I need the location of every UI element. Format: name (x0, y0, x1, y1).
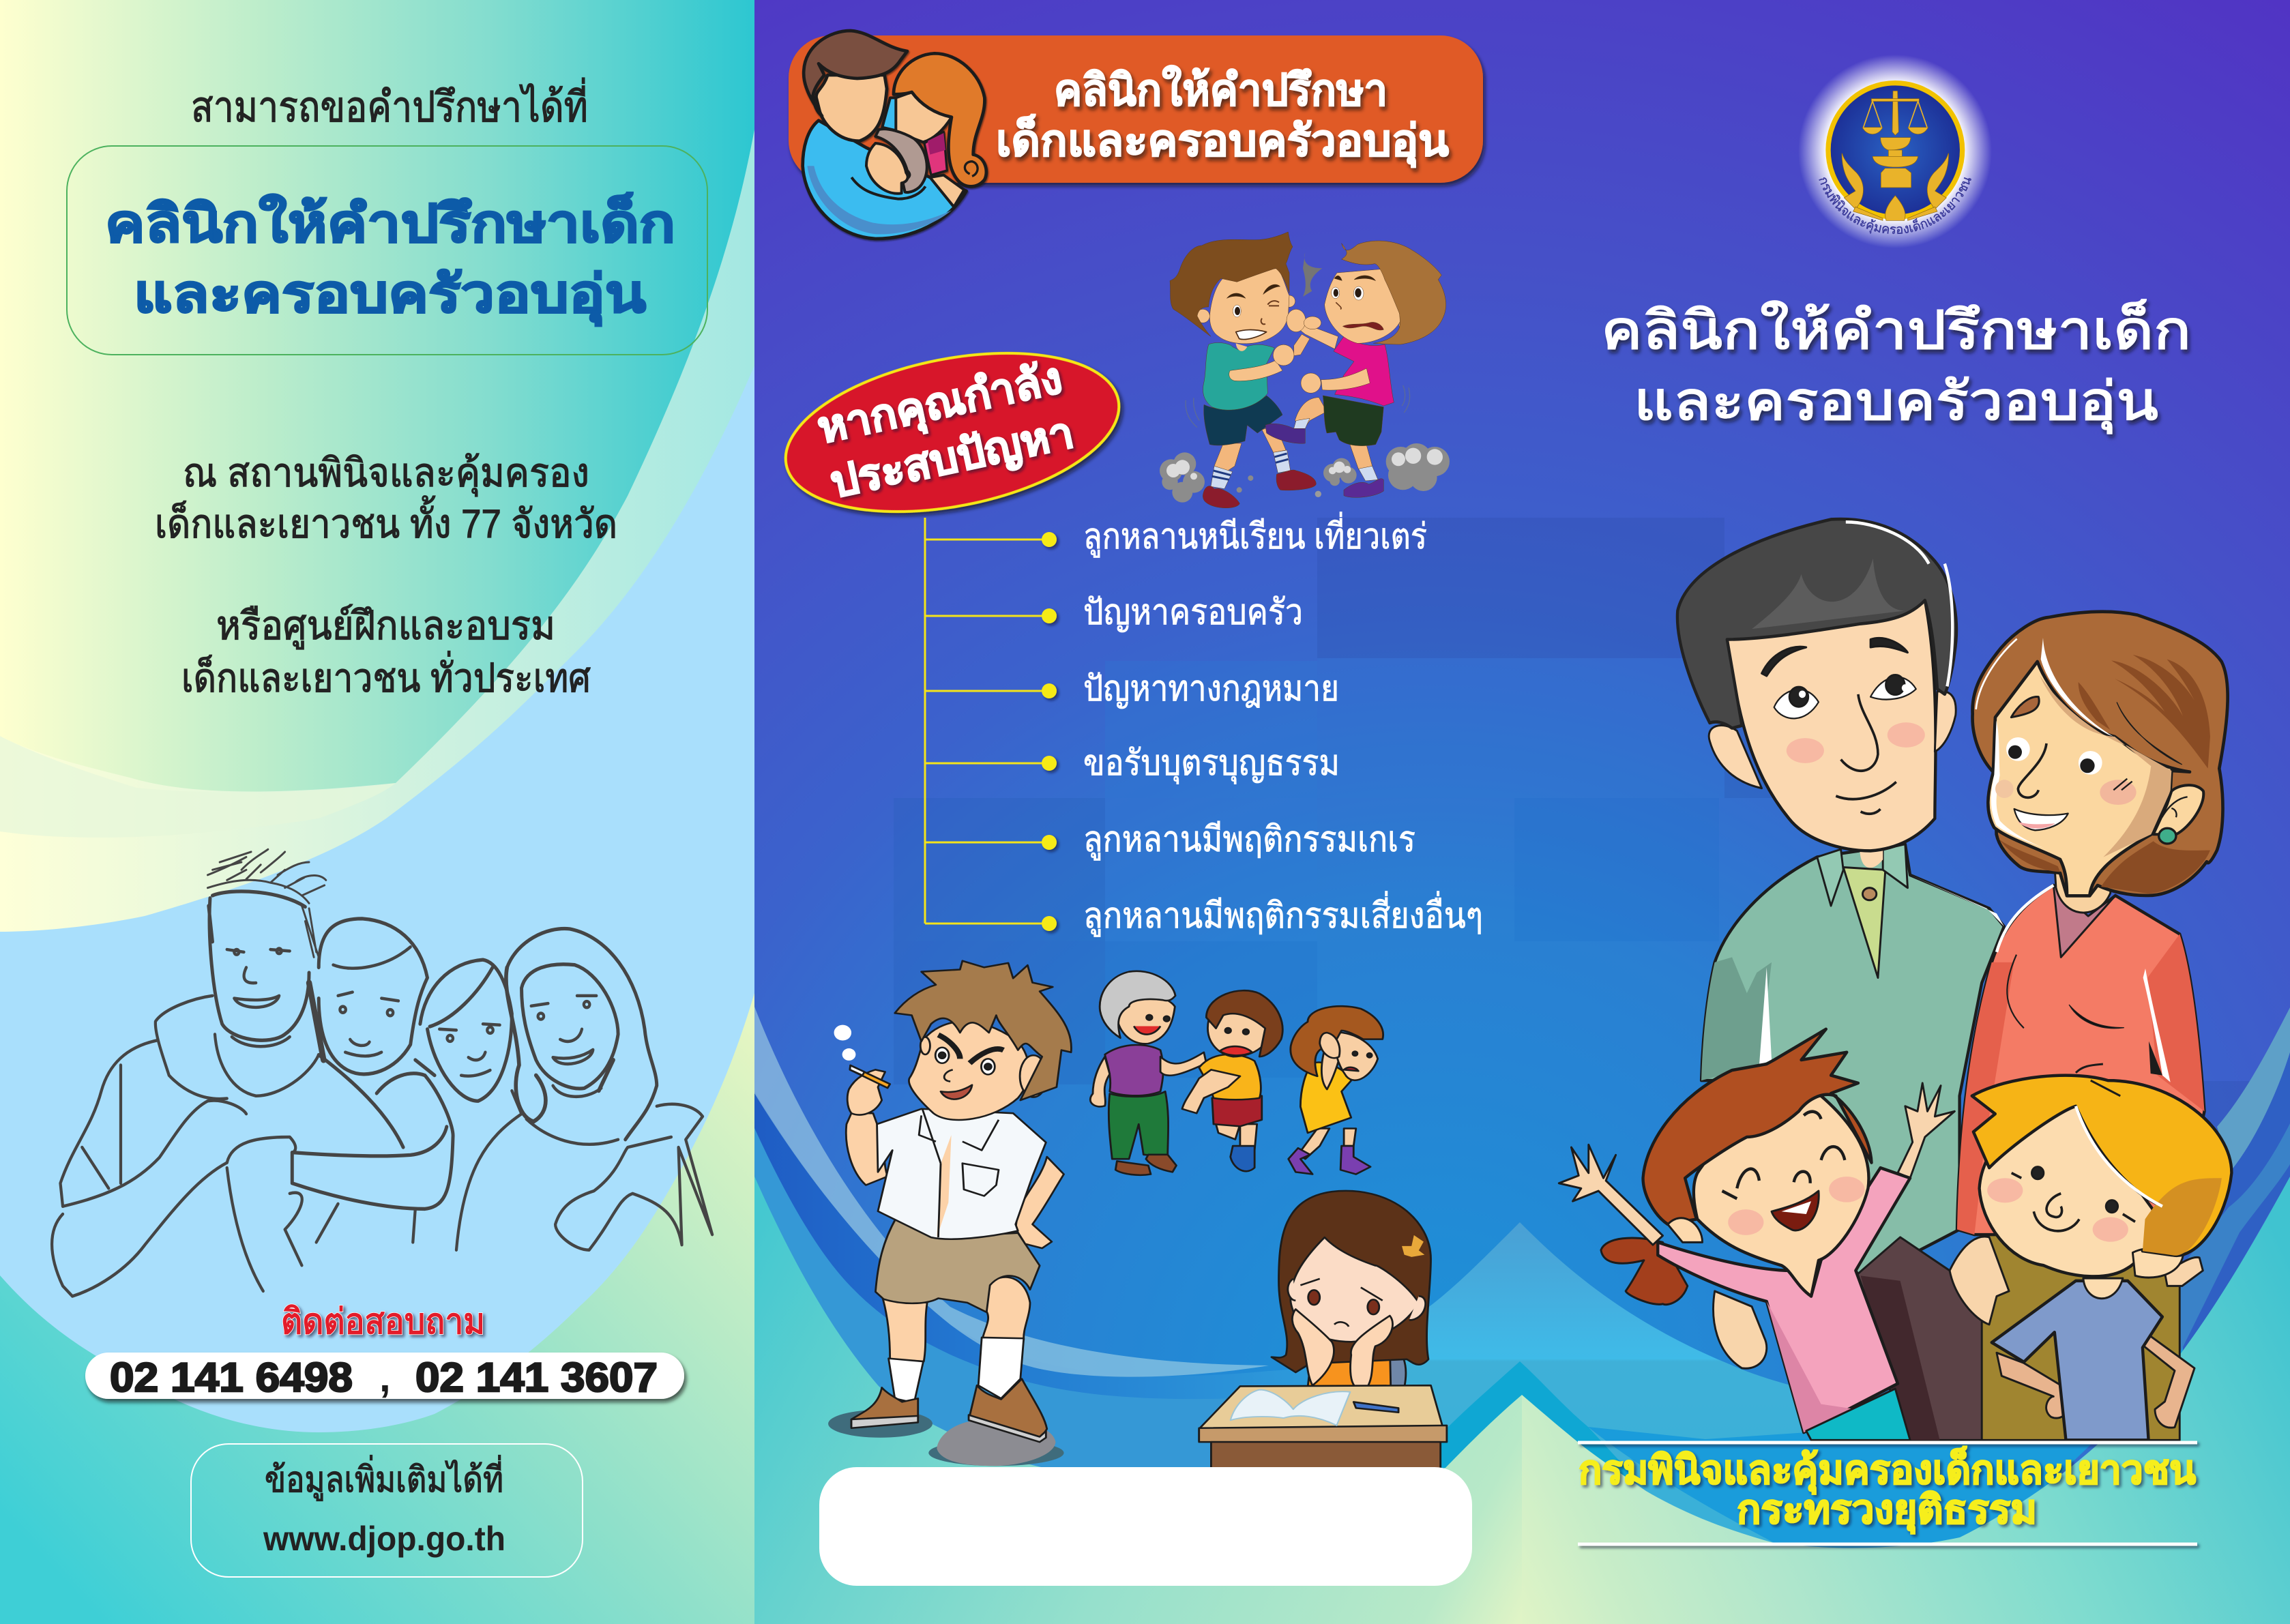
text block: locations: หรือศูนย์ฝึกและอบรม (216, 604, 555, 649)
mother head (1973, 612, 2228, 896)
swoosh bands center (754, 1091, 1364, 1501)
text block: locations: ณ สถานพินิจและคุ้มครอง (183, 451, 589, 497)
department name banner: กระทรวงยุติธรรม (1737, 1488, 2037, 1535)
phone number pill (85, 1353, 684, 1400)
illustration: happy family, father and mother (1677, 519, 2228, 1440)
text block: locations: เด็กและเยาวชน ทั้ง 77 จังหวัด (155, 496, 617, 546)
illustration: line drawing of family hugging (52, 849, 712, 1296)
swoosh bands right (2217, 1007, 2290, 1171)
header title text (996, 65, 1449, 168)
more information box: www.djop.go.th (263, 1520, 505, 1558)
icon: parents embracing baby (803, 31, 986, 239)
header title text: คลินิกให้คำปรึกษา (1054, 65, 1388, 115)
panel: bottom wave right (1522, 1177, 2290, 1624)
seal caption arc: กรมพินิจและคุ้มครองเด็กและเยาวชน (1819, 177, 1971, 235)
list of problems (1083, 512, 1483, 937)
panel: clinic name box (67, 146, 707, 355)
label: contact us: ติดต่อสอบถาม (281, 1302, 485, 1342)
roof peak light band (1262, 1222, 1520, 1480)
text block: locations (155, 451, 617, 700)
panel: main blue background (754, 0, 2290, 1624)
phone number pill: 02 141 6498 (110, 1355, 353, 1400)
more information box (191, 1444, 583, 1577)
header title text: เด็กและครอบครัวอบอุ่น (996, 115, 1449, 168)
list of problems: ลูกหลานมีพฤติกรรมเกเร (1083, 820, 1415, 861)
logo: department seal (1800, 56, 1991, 247)
left boy (1214, 443, 1242, 471)
phone number pill: , (379, 1355, 391, 1400)
panel: bottom wave center (754, 1177, 1522, 1624)
mother body (1950, 849, 2205, 1440)
roof peak deep band (1405, 1361, 1637, 1480)
main title (1601, 299, 2191, 434)
list of problems: ลูกหลานหนีเรียน เที่ยวเตร่ (1083, 512, 1427, 558)
illustration: boys fighting (1160, 232, 1450, 508)
diagram: yellow connector tree (925, 518, 1057, 931)
main title: คลินิกให้คำปรึกษาเด็ก (1601, 299, 2191, 360)
callout: red oval if you are facing problems: หากคุณกำลัง (813, 353, 1067, 455)
seal emblem (1828, 83, 1963, 220)
blank white panel (819, 1467, 1472, 1586)
illustration: happy girl (1559, 1029, 1954, 1440)
department name banner (1578, 1443, 2197, 1544)
list of problems: ขอรับบุตรบุญธรรม (1083, 743, 1340, 784)
header pill: clinic title (789, 35, 1483, 183)
heading: you can get advice at: สามารถขอคำปรึกษาได้ที่ (191, 78, 588, 131)
father head (1677, 519, 1956, 851)
illustration: sad girl at desk (1199, 1191, 1447, 1471)
illustration: blond boy (1972, 1064, 2231, 1440)
clinic name line 2: และครอบครัวอบอุ่น (134, 265, 646, 327)
list of problems: ปัญหาครอบครัว (1083, 593, 1303, 632)
right boy (1349, 441, 1372, 469)
mother sweater details (2069, 969, 2171, 1082)
illustration: old woman hitting child, scared girl (1090, 971, 1383, 1175)
illustration: boy smoking (828, 961, 1071, 1466)
callout: red oval if you are facing problems (772, 328, 1132, 537)
list of problems: ลูกหลานมีพฤติกรรมเสี่ยงอื่นๆ (1083, 891, 1483, 937)
department name banner: กรมพินิจและคุ้มครองเด็กและเยาวชน (1579, 1446, 2196, 1495)
father body (1701, 829, 2004, 1440)
phone number pill: 02 141 3607 (415, 1355, 658, 1400)
panel: left contact panel (0, 0, 754, 1624)
text block: locations: เด็กและเยาวชน ทั่วประเทศ (181, 651, 591, 700)
main title: และครอบครัวอบอุ่น (1634, 371, 2158, 434)
clinic name line 1: คลินิกให้คำปรึกษาเด็ก (105, 192, 675, 253)
callout: red oval if you are facing problems: ประสบปัญหา (826, 408, 1078, 507)
list of problems: ปัญหาทางกฎหมาย (1083, 669, 1339, 709)
more information box: ข้อมูลเพิ่มเติมได้ที่ (265, 1455, 503, 1501)
